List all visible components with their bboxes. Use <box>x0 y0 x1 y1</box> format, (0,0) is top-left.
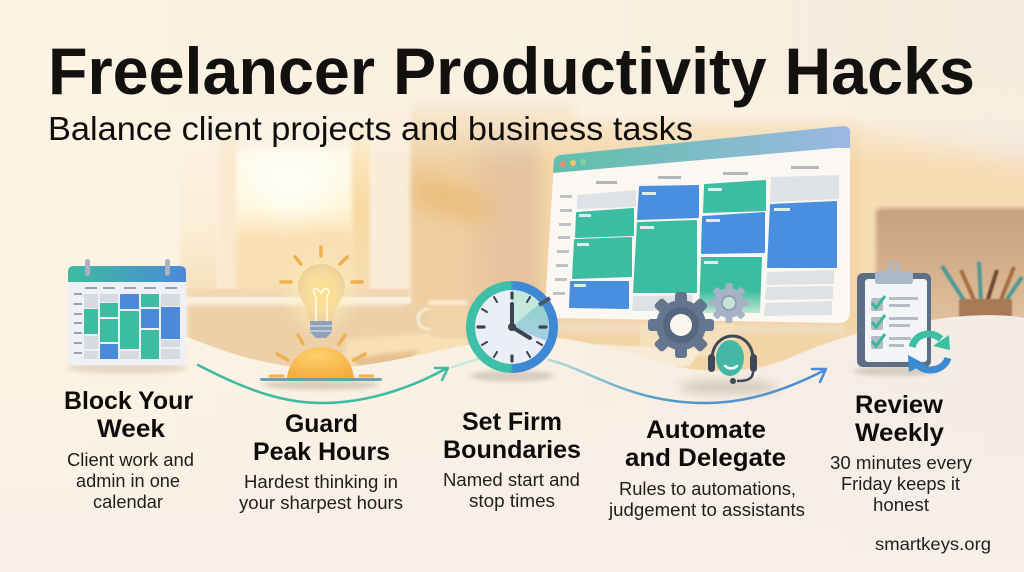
step 4 text: Automate <box>646 416 766 444</box>
pencil cup <box>942 262 1022 321</box>
calendar blocks <box>578 191 635 208</box>
step 4 text: and Delegate <box>625 444 786 472</box>
monitor with weekly calendar <box>545 126 850 334</box>
source credit: smartkeys.org <box>875 534 991 554</box>
step 2 text: your sharpest hours <box>239 493 403 513</box>
arrow: clock to review <box>549 360 826 403</box>
icon: light bulb and sunrise <box>260 247 382 390</box>
step 5 text: Review <box>855 391 944 419</box>
step 3 text: Named start and <box>443 470 580 490</box>
step 4 text <box>608 416 805 520</box>
icon: clock <box>466 281 558 382</box>
step 5 text: Friday keeps it <box>841 474 960 494</box>
title: Freelancer Productivity Hacks <box>48 34 975 108</box>
step 5 text <box>830 391 972 515</box>
bottom fade <box>0 390 1024 572</box>
step 3 text: stop times <box>469 491 555 511</box>
step 4 text: judgement to assistants <box>608 500 805 520</box>
step 1 text <box>64 387 194 512</box>
icon: clipboard with refresh <box>853 262 950 376</box>
step 1 text: admin in one <box>76 471 180 491</box>
bottom wave <box>0 300 1024 572</box>
arrow: calendar to clock <box>198 359 478 403</box>
step 5 text: 30 minutes every <box>830 453 972 473</box>
step 3 text: Boundaries <box>443 436 581 464</box>
step 2 text: Hardest thinking in <box>244 472 398 492</box>
step 4 text: Rules to automations, <box>619 479 796 499</box>
step 2 text: Peak Hours <box>253 438 390 466</box>
step 1 text: Week <box>97 415 165 443</box>
step 1 text: Block Your <box>64 387 193 415</box>
icon: calendar <box>67 259 187 374</box>
step 1 text: calendar <box>93 492 163 512</box>
icon: gears and headset <box>648 283 778 394</box>
desk mug <box>418 300 468 338</box>
calendar column labels <box>596 166 819 184</box>
subtitle: Balance client projects and business tasks <box>48 111 693 148</box>
step 5 text: Weekly <box>855 419 944 447</box>
calendar hour ticks <box>553 195 572 295</box>
monitor stand and keyboard <box>575 324 735 368</box>
step 1 text: Client work and <box>67 450 194 470</box>
step 3 text: Set Firm <box>462 408 562 436</box>
step 2 text: Guard <box>285 410 358 438</box>
step 3 text <box>443 408 581 511</box>
step 2 text <box>239 410 403 513</box>
step 5 text: honest <box>873 495 929 515</box>
